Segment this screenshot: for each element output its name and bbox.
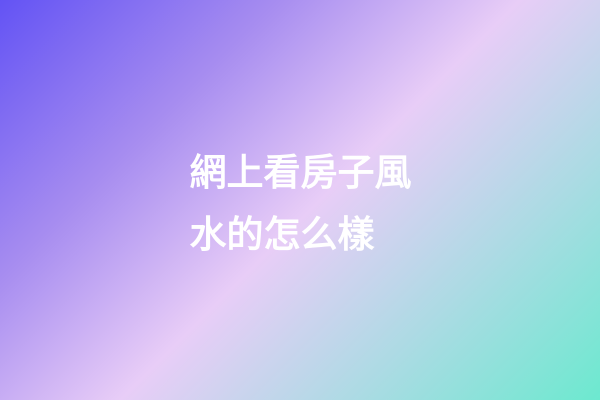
title xyxy=(190,152,412,254)
title: 水的怎么樣 xyxy=(190,214,374,254)
title: 網上看房子風 xyxy=(190,152,412,192)
